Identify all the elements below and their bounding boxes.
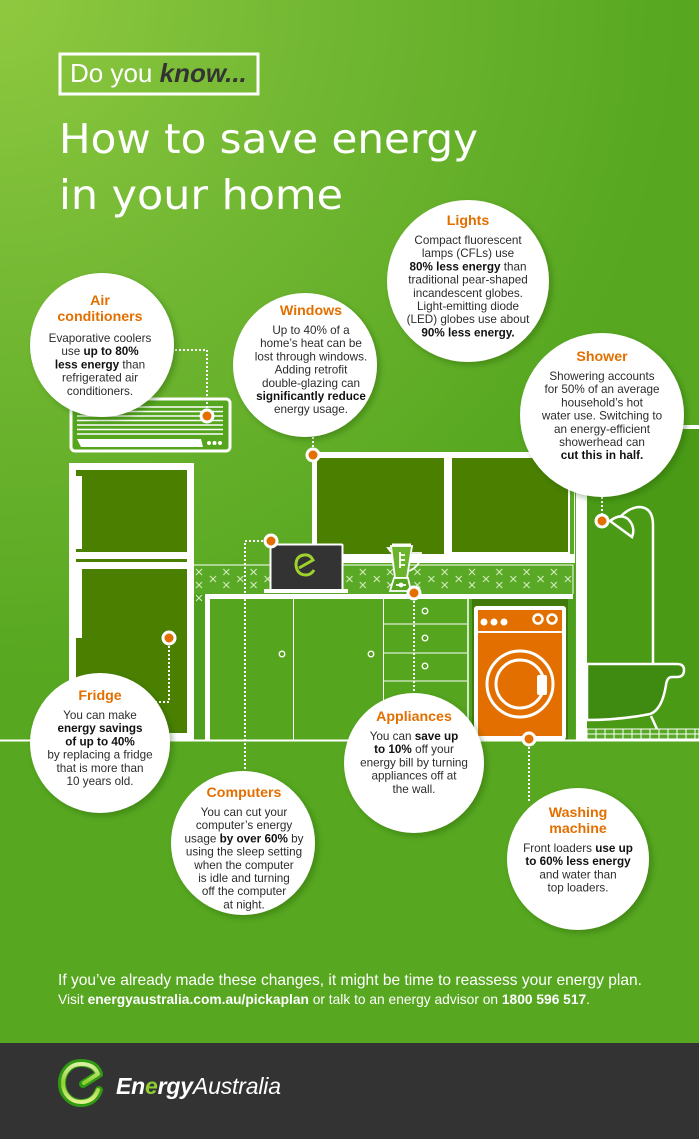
- callout: air conditioners: use: [61, 345, 83, 358]
- tag: Do you know: [60, 54, 258, 94]
- callout: lights: traditional pear-shaped: [408, 274, 528, 287]
- callout: windows: Windows: [280, 303, 342, 319]
- callout: air conditioners: than: [119, 358, 145, 371]
- callout: appliances: energy bill by turning: [360, 756, 468, 769]
- callout: air conditioners: conditioners: [57, 309, 143, 325]
- fridge: [69, 463, 194, 740]
- closing message: [58, 972, 642, 1007]
- callout: computers: is idle and turning: [198, 872, 290, 885]
- callout: appliances: Appliances: [376, 709, 452, 725]
- logo mark: [62, 1063, 99, 1103]
- callout: fridge: by replacing a fridge: [47, 749, 153, 762]
- callout: computers: Computers: [207, 785, 282, 801]
- callout: lights: Lights: [447, 213, 489, 229]
- callout: shower: cut this in half.: [561, 449, 643, 462]
- callout: air conditioners: refrigerated air: [62, 372, 138, 385]
- callout: shower: for 50% of an average: [544, 383, 660, 396]
- callout: fridge: that is more than: [56, 762, 144, 775]
- callout: appliances: appliances off at: [372, 770, 457, 783]
- callout: lights: 80% less energy: [410, 260, 501, 273]
- washing machine: [472, 599, 568, 740]
- callout: shower: household’s hot: [561, 396, 644, 409]
- callout: appliances: You can save up: [370, 730, 458, 743]
- callout: washing machine: Front loaders use up: [523, 842, 633, 855]
- callout: fridge: 10 years old.: [67, 775, 133, 788]
- wall panel behind cabinets: [194, 565, 575, 740]
- upper cabinets: [312, 452, 575, 563]
- logo wordmark: EnergyAustralia: [116, 1073, 281, 1099]
- callout: windows: energy usage.: [274, 403, 348, 416]
- floor line: [0, 740, 699, 742]
- callout: air conditioners: [30, 273, 174, 417]
- air conditioner: [71, 399, 230, 451]
- splashback: [194, 565, 573, 601]
- callout: computers: using the sleep setting: [186, 846, 302, 859]
- callout: windows: Adding retrofit: [275, 364, 348, 377]
- callout: shower: showerhead can: [559, 436, 645, 449]
- callout: fridge: [30, 673, 170, 813]
- callout: windows: home’s heat can be: [260, 337, 362, 350]
- callout: windows: double-glazing can: [262, 377, 360, 390]
- callout: computers: off the computer: [202, 885, 286, 898]
- callout: windows: Up to 40% of a: [272, 324, 350, 337]
- kitchen and bathroom scene: [0, 425, 699, 742]
- callout: fridge: You can make: [63, 709, 137, 722]
- bathtub: [587, 664, 684, 729]
- floor tiles: [587, 729, 699, 739]
- lower cabinets: [205, 594, 573, 740]
- callout: computers: at night.: [223, 898, 265, 911]
- callout: fridge: of up to 40%: [65, 735, 135, 748]
- callout: washing machine: Washing: [549, 805, 607, 821]
- logo: EnergyAustralia: [62, 1063, 281, 1103]
- callout: fridge: Fridge: [78, 688, 122, 704]
- callout: computers: by over 60% by: [220, 832, 303, 845]
- callout: air conditioners: up to 80%: [83, 345, 139, 358]
- shower: [610, 507, 653, 664]
- callout: shower: water use. Switching to: [541, 410, 663, 423]
- footer bar: [0, 1043, 699, 1139]
- callout: air conditioners: less energy: [55, 358, 120, 371]
- closing message: If you’ve already made these changes, it might be time to reassess your energy plan.: [58, 972, 642, 989]
- callout: air conditioners: Air: [90, 293, 110, 309]
- callout: appliances: to 10%: [374, 743, 412, 756]
- callout: windows: significantly reduce: [256, 390, 366, 403]
- callout: computers: when the computer: [193, 859, 294, 872]
- bathroom wall: [576, 428, 699, 740]
- callout: washing machine: to 60% less energy: [525, 855, 631, 868]
- closing message: Visit energyaustralia.com.au/pickaplan or talk to an energy advisor on 1800 596 517.: [58, 991, 590, 1007]
- callout: shower: Shower: [576, 349, 628, 365]
- callout: lights: Light-emitting diode: [417, 300, 519, 313]
- callout: windows: lost through windows.: [255, 350, 367, 363]
- callout: washing machine: [507, 788, 649, 930]
- callout: lights: [387, 200, 549, 362]
- title: How to save energy: [59, 115, 478, 163]
- callout: shower: [520, 333, 684, 497]
- callout: shower: Showering accounts: [549, 370, 655, 383]
- laptop: [264, 544, 348, 593]
- callout: lights: incandescent globes.: [413, 287, 523, 300]
- callout: lights: 90% less energy.: [421, 326, 515, 339]
- callout: shower: an energy-efficient: [554, 423, 651, 436]
- callout: washing machine: machine: [549, 821, 607, 837]
- callout: windows: [233, 293, 377, 437]
- callout: appliances: the wall.: [393, 783, 435, 796]
- tag: Do you know: Do you know...: [70, 58, 247, 88]
- callout: washing machine: and water than: [539, 868, 617, 881]
- callout: lights: lamps (CFLs) use: [422, 247, 514, 260]
- callout: appliances: [344, 693, 484, 833]
- callout: appliances: off your: [412, 743, 454, 756]
- callout: computers: You can cut your: [201, 806, 287, 819]
- callout: air conditioners: conditioners.: [67, 385, 133, 398]
- callout: lights: Compact fluorescent: [414, 234, 522, 247]
- callout: computers: usage: [185, 832, 220, 845]
- callout: lights: (LED) globes use about: [407, 313, 530, 326]
- title: in your home: [59, 171, 343, 219]
- callout: air conditioners: Evaporative coolers: [49, 332, 151, 345]
- callout: computers: computer’s energy: [196, 819, 292, 832]
- callout: computers: [171, 771, 315, 915]
- title: [59, 115, 478, 219]
- dotted connectors: [155, 350, 602, 803]
- callout: fridge: energy savings: [57, 722, 143, 735]
- blender: [388, 544, 421, 591]
- callout: washing machine: top loaders.: [547, 882, 609, 895]
- callout: lights: than: [500, 260, 526, 273]
- marker dots: [163, 410, 608, 745]
